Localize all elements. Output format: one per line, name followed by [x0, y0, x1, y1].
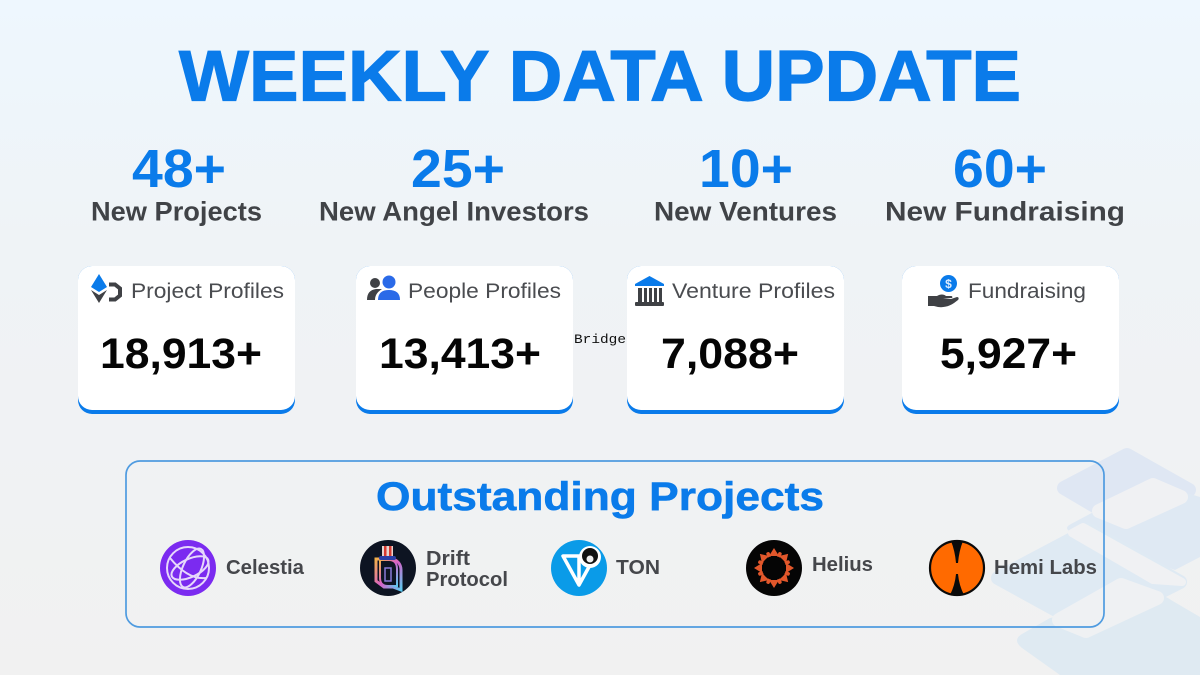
stat: new ventures: [654, 139, 837, 226]
stat: new fundraising: [885, 139, 1125, 226]
card: fundraising: 5,927+: [940, 330, 1077, 378]
card: venture profiles: 7,088+: [661, 330, 799, 378]
stat: new projects: [91, 139, 262, 226]
panel: outstanding projects: [126, 461, 1104, 627]
stat: new projects: 48+: [132, 139, 226, 199]
stat: new ventures: New Ventures: [654, 196, 837, 226]
project: celestia: Celestia: [226, 557, 305, 579]
icon: hand with coin: [928, 275, 959, 307]
icon: project: [91, 274, 120, 303]
decorative diamonds: [998, 455, 1200, 675]
project: helius: [746, 540, 873, 596]
card: people profiles: People Profiles: [408, 280, 561, 303]
card: project profiles: [78, 266, 295, 414]
card: people profiles: [356, 266, 573, 414]
project: hemi labs: Hemi Labs: [994, 557, 1097, 579]
stat: new projects: New Projects: [91, 196, 262, 226]
project: drift protocol: Protocol: [426, 569, 508, 591]
project: helius: Helius: [812, 554, 873, 576]
icon: hand with coin: $: [945, 277, 952, 291]
stat: new fundraising: 60+: [953, 139, 1047, 199]
card: venture profiles: [627, 266, 844, 414]
panel heading: Outstanding Projects: [376, 475, 824, 519]
project: hemi labs: [930, 541, 1097, 595]
stray label: bridge: Bridge: [574, 332, 626, 347]
card: people profiles: 13,413+: [379, 330, 541, 378]
card: project profiles: Project Profiles: [131, 280, 284, 303]
project: ton: TON: [616, 557, 660, 579]
card: project profiles: 18,913+: [100, 330, 262, 378]
stat: new angel investors: 25+: [411, 139, 505, 199]
stat: new fundraising: New Fundraising: [885, 196, 1125, 226]
card: venture profiles: Venture Profiles: [672, 280, 835, 303]
card: fundraising: [902, 266, 1119, 414]
project: drift protocol: Drift: [426, 548, 470, 570]
stat: new angel investors: [319, 139, 589, 226]
project: ton: [551, 540, 660, 596]
title: WEEKLY DATA UPDATE: [179, 38, 1021, 116]
project: celestia: [160, 540, 305, 596]
project: drift protocol: [360, 540, 508, 596]
icon: people: [367, 276, 400, 300]
stat: new ventures: 10+: [699, 139, 793, 199]
icon: bank: [635, 276, 664, 306]
stat: new angel investors: New Angel Investors: [319, 196, 589, 226]
card: fundraising: Fundraising: [968, 280, 1086, 303]
